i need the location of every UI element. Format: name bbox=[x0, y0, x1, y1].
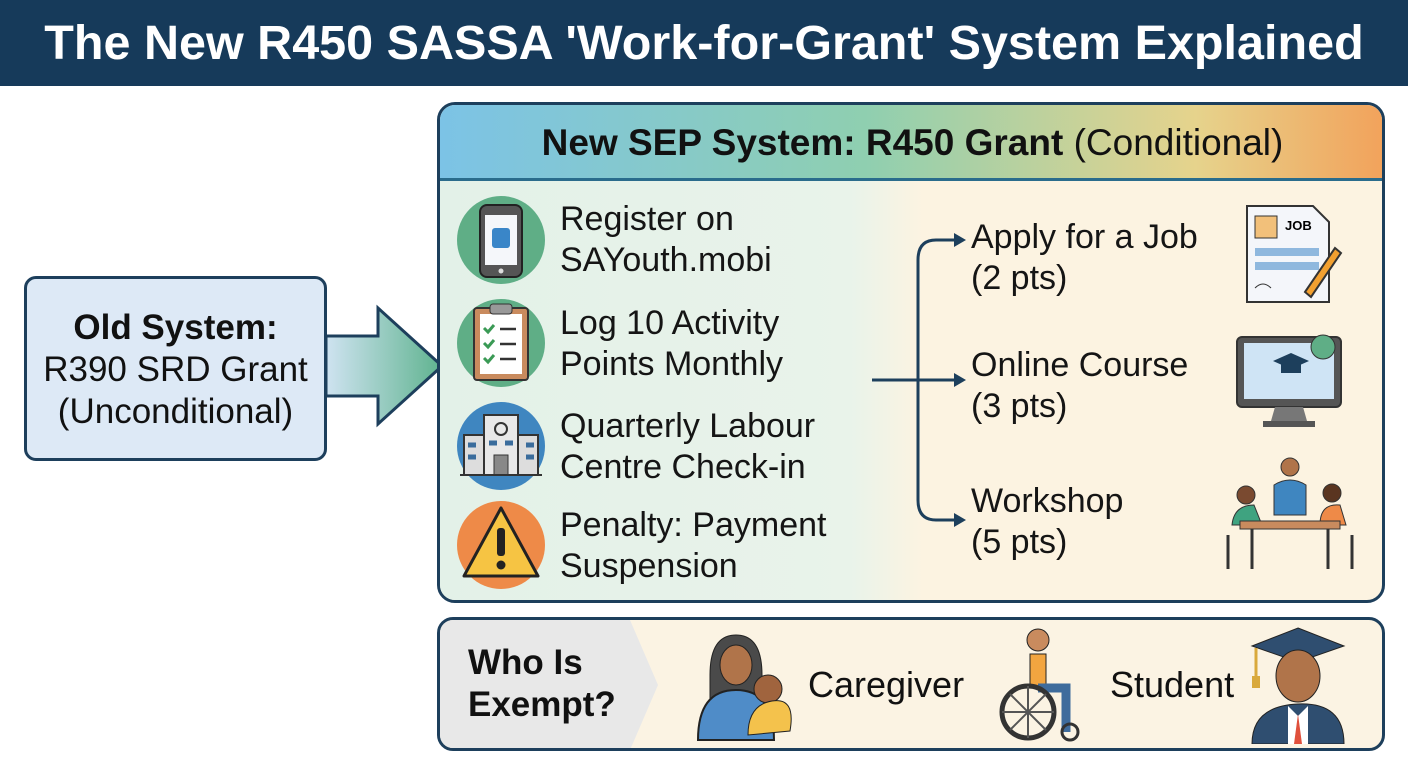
icon: job form bbox=[1246, 205, 1342, 303]
label: who is exempt bbox=[440, 620, 658, 750]
panel: old system: (Unconditional) bbox=[58, 392, 293, 431]
text: workshop bbox=[971, 482, 1123, 561]
panel: old system bbox=[24, 276, 327, 461]
text: labour centre bbox=[560, 407, 815, 486]
text: workshop: (5 pts) bbox=[971, 523, 1067, 561]
text: penalty: Suspension bbox=[560, 547, 738, 585]
text: online course bbox=[971, 346, 1188, 425]
panel: who is exempt bbox=[437, 617, 1385, 751]
title bar bbox=[0, 0, 1408, 86]
text: log points: Points Monthly bbox=[560, 345, 783, 383]
header: new SEP system bbox=[440, 105, 1385, 181]
text: labour centre: Centre Check-in bbox=[560, 448, 806, 486]
icon: warning bbox=[457, 501, 545, 589]
title bar: The New R450 SASSA 'Work-for-Grant' System Explained bbox=[44, 16, 1364, 70]
text: labour centre: Quarterly Labour bbox=[560, 407, 815, 445]
text: register bbox=[560, 200, 772, 279]
text: online course: Online Course bbox=[971, 346, 1188, 384]
icon: graduate bbox=[1250, 628, 1346, 744]
text: penalty: Penalty: Payment bbox=[560, 506, 826, 544]
text: log points bbox=[560, 304, 783, 383]
panel: new SEP system bbox=[437, 102, 1385, 603]
text: apply for job: Apply for a Job bbox=[971, 218, 1198, 256]
panel: old system: R390 SRD Grant bbox=[43, 350, 308, 389]
icon: computer bbox=[1236, 334, 1342, 427]
icon: building bbox=[457, 402, 545, 490]
text: workshop: Workshop bbox=[971, 482, 1123, 520]
panel: old system: Old System: bbox=[73, 308, 278, 347]
text: caregiver: Caregiver bbox=[808, 664, 964, 705]
icon: wheelchair bbox=[1000, 628, 1080, 742]
header: new SEP system: New SEP System: R450 Grant (Conditional) bbox=[542, 122, 1283, 163]
arrow: bracket bbox=[872, 233, 966, 527]
text: online course: (3 pts) bbox=[971, 387, 1067, 425]
text: apply for job bbox=[971, 218, 1198, 297]
icon: caregiver bbox=[697, 634, 792, 741]
text: penalty bbox=[560, 506, 826, 585]
icon: job form: JOB bbox=[1285, 218, 1312, 233]
text: apply for job: (2 pts) bbox=[971, 259, 1067, 297]
text: student: Student bbox=[1110, 664, 1234, 705]
text: log points: Log 10 Activity bbox=[560, 304, 779, 342]
text: register: Register on bbox=[560, 200, 734, 238]
label: who is exempt: Exempt? bbox=[468, 685, 616, 724]
text: register: SAYouth.mobi bbox=[560, 241, 772, 279]
arrow: old to new bbox=[327, 304, 437, 428]
icon: phone bbox=[457, 196, 545, 284]
icon: clipboard bbox=[457, 299, 545, 387]
icon: workshop people bbox=[1226, 458, 1354, 569]
label: who is exempt: Who Is bbox=[468, 643, 583, 682]
